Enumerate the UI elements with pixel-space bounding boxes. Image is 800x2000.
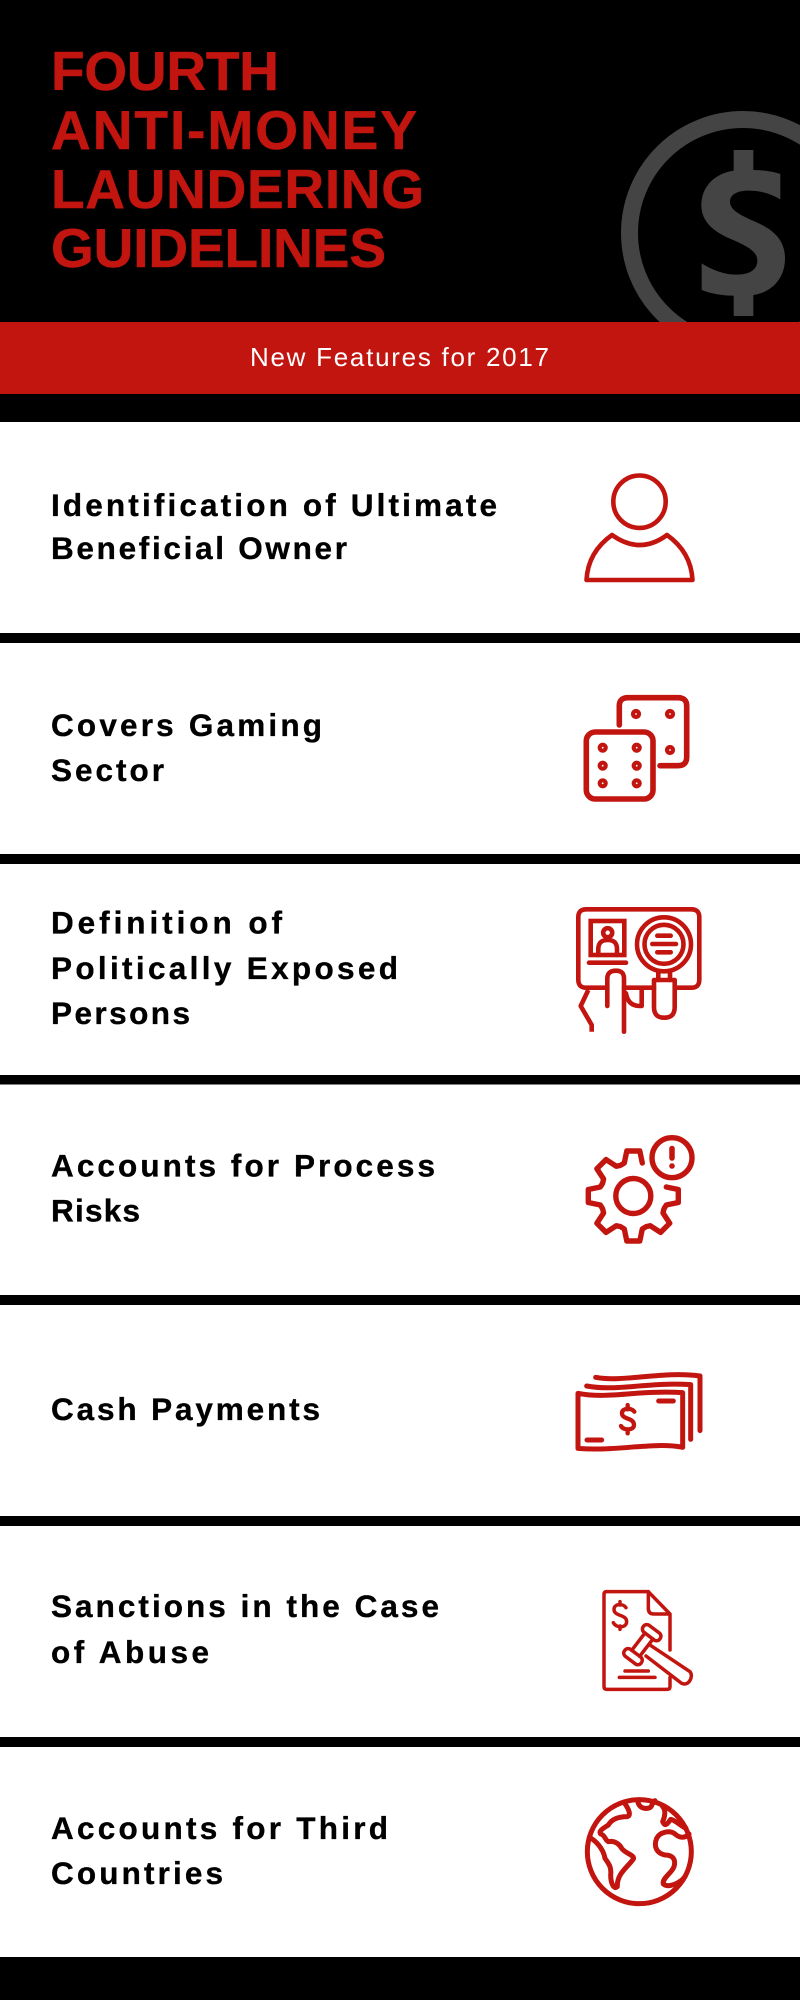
icon: globe [587,1800,691,1904]
icon: gear with warning [588,1138,692,1241]
heading: third countries [51,1810,388,1891]
heading: gaming sector: Sector [51,752,164,788]
icon: dollar coin watermark [630,120,800,346]
heading: sanctions: Sanctions in the Case [51,1588,439,1624]
panel: sanctions [0,1526,800,1737]
heading: third countries: Accounts for Third [51,1810,388,1846]
panel: gaming sector [0,643,800,854]
heading: ultimate beneficial owner [51,487,497,566]
heading: politically exposed persons [51,904,398,1031]
heading: ultimate beneficial owner: Identification of Ultimate [51,487,497,523]
subtitle band: New Features for 2017 [250,342,549,372]
title: GUIDELINES [51,217,386,279]
icon: banknotes [578,1375,700,1449]
title: ANTI-MONEY [51,99,417,161]
heading: process risks [51,1148,435,1229]
heading: sanctions: of Abuse [51,1634,209,1670]
icon: identity card, hand and magnifier [578,909,699,1032]
heading: gaming sector [51,707,322,788]
heading: third countries: Countries [51,1855,223,1891]
heading: politically exposed persons: Definition of [51,904,282,940]
title: FOURTH [51,40,279,102]
icon: document and gavel [604,1592,691,1689]
heading: process risks: Accounts for Process [51,1148,435,1184]
panel: politically exposed persons [0,864,800,1075]
heading: gaming sector: Covers Gaming [51,707,322,743]
panel: ultimate beneficial owner [0,422,800,633]
heading: politically exposed persons: Politically Exposed [51,950,398,986]
heading: cash payments: Cash Payments [51,1391,320,1427]
heading: sanctions [51,1588,439,1670]
subtitle band [0,322,800,394]
icon: dice [586,698,687,799]
heading: politically exposed persons: Persons [51,995,190,1031]
panel: cash payments [0,1305,800,1516]
heading: process risks: Risks [51,1193,140,1229]
panel: third countries [0,1747,800,1957]
icon: person [586,476,692,580]
panel: process risks [0,1084,800,1295]
title [51,40,424,279]
title: LAUNDERING [51,158,424,220]
heading: ultimate beneficial owner: Beneficial Owner [51,530,347,566]
